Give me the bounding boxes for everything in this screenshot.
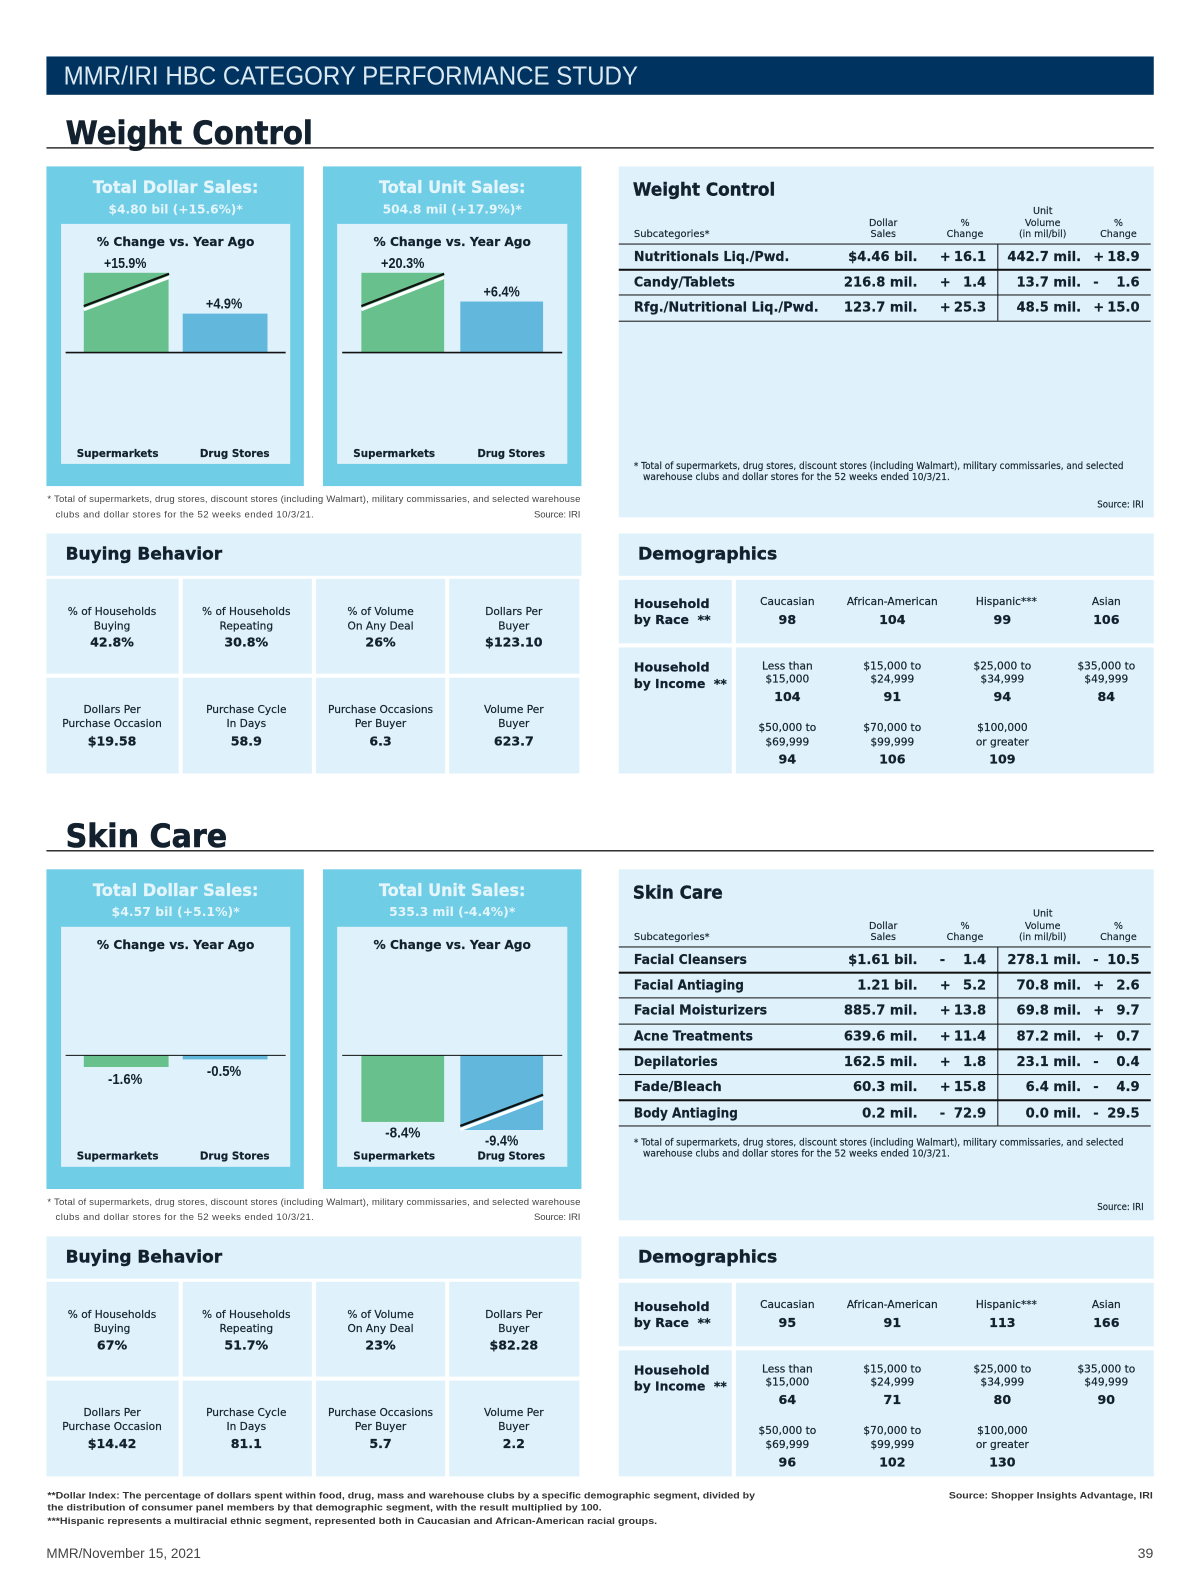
table rows: 25.3	[954, 301, 986, 316]
panel: demographics: $35,000 to	[1077, 1364, 1135, 1376]
table rows: +	[1093, 1030, 1104, 1045]
bar chart: unit sales: Supermarkets	[353, 448, 435, 460]
panel: buying behavior: % of Households	[68, 1309, 156, 1321]
table rows: Rfg./Nutritional Liq./Pwd.	[634, 301, 819, 316]
bar chart: unit sales: -9.4%	[485, 1133, 519, 1150]
table rows: $1.61 bil.	[848, 953, 918, 968]
table rows: 0.4	[1116, 1055, 1140, 1070]
panel: demographics: 99	[994, 612, 1011, 627]
table rows: Fade/Bleach	[634, 1080, 722, 1095]
table rows: +	[1093, 250, 1104, 265]
table rows: 1.6	[1116, 275, 1140, 290]
bar chart: dollar sales: Supermarkets	[77, 1151, 158, 1163]
panel: demographics: or greater	[976, 1439, 1030, 1451]
page footer: 39	[1138, 1545, 1153, 1561]
table header: Change	[947, 229, 983, 240]
table header: Volume	[1025, 921, 1061, 932]
panel: demographics: 104	[774, 689, 801, 704]
panel: demographics: 109	[989, 751, 1016, 766]
bar chart: unit sales: +20.3%	[381, 255, 425, 272]
table rows	[619, 244, 1151, 322]
table rows: +	[940, 301, 951, 316]
panel: demographics: $34,999	[980, 1377, 1024, 1389]
dollar index footnotes: the distribution of consumer panel members by that demographic segment, with the result multiplied by 100.	[47, 1503, 602, 1514]
panel: subcategories table: Weight Control	[633, 180, 775, 201]
panel: demographics: 166	[1093, 1315, 1120, 1330]
panel: buying behavior: $123.10	[485, 634, 543, 649]
panel: demographics: $70,000 to	[863, 722, 921, 734]
table header: %	[1114, 218, 1123, 229]
bar chart: dollar sales	[66, 255, 286, 460]
panel: demographics: Hispanic***	[976, 1299, 1037, 1311]
bar chart: dollar sales: -0.5%	[207, 1063, 242, 1080]
table rows: 13.7 mil.	[1017, 275, 1081, 290]
panel: demographics: 95	[779, 1315, 796, 1330]
panel: demographics: $100,000	[977, 1425, 1028, 1437]
table rows: +	[1093, 1004, 1104, 1019]
panel: demographics: 64	[779, 1392, 796, 1407]
bar chart: dollar sales: Drug Stores	[200, 448, 270, 460]
chart footnote: Source: IRI	[534, 509, 580, 520]
panel: buying behavior: 81.1	[231, 1436, 262, 1451]
table header: Volume	[1025, 218, 1061, 229]
panel: demographics: Caucasian	[760, 596, 815, 608]
panel: buying behavior: Dollars Per	[84, 1407, 141, 1419]
panel: demographics: by Race **	[634, 612, 711, 627]
panel: demographics: Asian	[1092, 1299, 1121, 1311]
table rows: 87.2 mil.	[1017, 1030, 1081, 1045]
table rows: 5.2	[963, 978, 986, 993]
table rows: 162.5 mil.	[844, 1055, 918, 1070]
panel: demographics: $69,999	[765, 736, 809, 748]
panel: demographics: 91	[884, 1315, 901, 1330]
panel: total unit sales: Total Unit Sales:	[379, 178, 525, 198]
panel: buying behavior: In Days	[226, 1421, 266, 1433]
panel: demographics: 91	[884, 689, 901, 704]
panel: demographics: $99,999	[870, 736, 914, 748]
table rows: 1.21 bil.	[857, 978, 918, 993]
table rows: 0.7	[1116, 1030, 1140, 1045]
table rows: -	[940, 1106, 945, 1121]
panel: total dollar sales: Total Dollar Sales:	[93, 178, 258, 198]
panel: demographics: $49,999	[1084, 1377, 1128, 1389]
panel: buying behavior: 67%	[97, 1337, 128, 1352]
panel: demographics: 98	[779, 612, 796, 627]
panel: buying behavior: Buyer	[498, 620, 530, 632]
panel: demographics: 94	[994, 689, 1011, 704]
bar chart: dollar sales: +15.9%	[104, 255, 147, 272]
table rows: Facial Cleansers	[634, 953, 747, 968]
table rows: -	[1093, 275, 1099, 290]
table header: %	[960, 921, 970, 932]
panel: subcategories table	[619, 166, 1154, 517]
table header: Subcategories*	[634, 932, 710, 943]
table rows: +	[1093, 978, 1104, 993]
table rows: 0.2 mil.	[862, 1106, 918, 1121]
table header: (in mil/bil)	[1019, 229, 1066, 240]
table rows: Facial Moisturizers	[634, 1004, 767, 1019]
table rows: -	[1093, 1080, 1099, 1095]
panel: demographics: $15,000	[765, 674, 809, 686]
table rows: 72.9	[954, 1106, 986, 1121]
panel: demographics: $35,000 to	[1077, 661, 1135, 673]
table rows: 69.8 mil.	[1017, 1004, 1081, 1019]
table rows: 48.5 mil.	[1017, 301, 1081, 316]
panel: demographics: $24,999	[870, 1377, 914, 1389]
panel: demographics: $15,000 to	[863, 661, 921, 673]
panel: total unit sales: 535.3 mil (-4.4%)*	[389, 905, 516, 919]
panel: buying behavior: 6.3	[369, 733, 392, 748]
table rows: +	[940, 1030, 951, 1045]
panel: buying behavior: % of Volume	[347, 606, 414, 618]
panel: buying behavior: In Days	[226, 718, 266, 730]
section title: weight control: Weight Control	[66, 114, 313, 152]
panel: demographics	[619, 1236, 1154, 1476]
table header: Sales	[870, 932, 896, 943]
chart footnote	[47, 1197, 580, 1223]
dollar index footnotes: ***Hispanic represents a multiracial ethnic segment, represented both in Caucasian and African-American racial groups.	[47, 1516, 657, 1527]
table header: Change	[947, 932, 983, 943]
table rows: +	[1093, 301, 1104, 316]
panel: demographics: Household	[634, 660, 710, 675]
table rows: -	[1093, 1106, 1099, 1121]
chart footnote: Source: IRI	[534, 1212, 580, 1223]
panel: demographics: $99,999	[870, 1439, 914, 1451]
panel: buying behavior: Buying	[94, 1323, 130, 1335]
panel: buying behavior: % of Households	[202, 1309, 291, 1321]
table rows: 29.5	[1107, 1106, 1140, 1121]
panel: buying behavior: 623.7	[494, 733, 534, 748]
table header: Unit	[1033, 206, 1053, 217]
table rows: -	[1093, 953, 1099, 968]
page footer	[46, 1545, 1153, 1561]
header banner	[46, 56, 1154, 95]
table rows: 442.7 mil.	[1007, 250, 1081, 265]
panel: total dollar sales: $4.80 bil (+15.6%)*	[109, 202, 243, 216]
panel: demographics: Household	[634, 1363, 710, 1378]
panel: buying behavior: $19.58	[88, 733, 136, 748]
table rows: 18.9	[1107, 250, 1140, 265]
panel: demographics: 80	[994, 1392, 1011, 1407]
table rows: -	[940, 953, 945, 968]
panel: demographics: $15,000	[765, 1377, 809, 1389]
panel: buying behavior: 23%	[365, 1337, 396, 1352]
table footnote: warehouse clubs and dollar stores for the 52 weeks ended 10/3/21.	[643, 1149, 950, 1160]
panel: demographics: 96	[779, 1454, 796, 1469]
table rows: Nutritionals Liq./Pwd.	[634, 250, 789, 265]
table rows: +	[940, 1080, 951, 1095]
panel: buying behavior: Purchase Cycle	[206, 1407, 286, 1419]
table rows: +	[940, 978, 951, 993]
panel: demographics: $15,000 to	[863, 1364, 921, 1376]
panel: buying behavior: 5.7	[369, 1436, 392, 1451]
panel: demographics: $25,000 to	[973, 1364, 1031, 1376]
bar chart: unit sales: +6.4%	[484, 283, 520, 300]
panel: total unit sales: % Change vs. Year Ago	[373, 938, 531, 952]
panel: subcategories table: Skin Care	[633, 883, 723, 904]
panel: demographics: 84	[1098, 689, 1115, 704]
panel: buying behavior: Per Buyer	[355, 1421, 407, 1433]
table rows: 885.7 mil.	[844, 1004, 918, 1019]
table header	[634, 206, 1137, 240]
panel: total dollar sales: % Change vs. Year Ago	[97, 938, 254, 952]
panel: buying behavior: 51.7%	[224, 1337, 269, 1352]
table rows: 10.5	[1107, 953, 1140, 968]
panel: buying behavior: Purchase Occasion	[62, 1421, 162, 1433]
panel: buying behavior: % of Households	[202, 606, 291, 618]
panel: buying behavior: % of Volume	[347, 1309, 414, 1321]
panel: buying behavior: Volume Per	[484, 1407, 544, 1419]
table rows: 16.1	[954, 250, 986, 265]
section title: skin care: Skin Care	[66, 817, 227, 855]
panel: demographics: by Income **	[634, 1379, 727, 1394]
bar chart: unit sales: Drug Stores	[477, 448, 545, 460]
bar chart: dollar sales: Supermarkets	[77, 448, 158, 460]
panel: demographics: $50,000 to	[758, 1425, 816, 1437]
panel: demographics: African-American	[847, 1299, 938, 1311]
section: weight control	[46, 114, 1154, 774]
panel: demographics: 106	[879, 751, 906, 766]
panel: demographics: 104	[879, 612, 906, 627]
panel: demographics: 71	[884, 1392, 901, 1407]
bar chart: unit sales: Drug Stores	[477, 1151, 545, 1163]
table rows: Body Antiaging	[634, 1106, 738, 1121]
table rows: 1.8	[963, 1055, 986, 1070]
table footnote: Source: IRI	[1097, 499, 1144, 510]
table rows: Acne Treatments	[634, 1030, 753, 1045]
panel: buying behavior: Dollars Per	[485, 1309, 543, 1321]
table footnote: Source: IRI	[1097, 1202, 1144, 1213]
table rows: 0.0 mil.	[1026, 1106, 1081, 1121]
panel: buying behavior: 30.8%	[224, 634, 269, 649]
panel: demographics: Hispanic***	[976, 596, 1037, 608]
panel: buying behavior: Buyer	[498, 718, 530, 730]
table rows: 70.8 mil.	[1017, 978, 1081, 993]
table rows: +	[940, 1055, 951, 1070]
panel: demographics: 130	[989, 1454, 1016, 1469]
bar chart: unit sales	[342, 255, 562, 460]
panel: total unit sales: 504.8 mil (+17.9%)*	[383, 202, 523, 216]
bar chart: dollar sales: Drug Stores	[200, 1151, 270, 1163]
panel: demographics: Demographics	[638, 545, 777, 565]
panel: total unit sales: % Change vs. Year Ago	[373, 235, 531, 249]
table rows: $4.46 bil.	[848, 250, 918, 265]
panel: demographics: Less than	[762, 661, 813, 673]
panel: demographics: 102	[879, 1454, 905, 1469]
table rows: +	[940, 275, 951, 290]
panel: buying behavior: Repeating	[219, 620, 273, 632]
table header: Subcategories*	[634, 229, 710, 240]
panel: demographics: by Income **	[634, 676, 727, 691]
panel: total unit sales	[323, 166, 581, 486]
header banner: MMR/IRI HBC CATEGORY PERFORMANCE STUDY	[64, 61, 638, 91]
table footnote	[634, 461, 1144, 510]
chart footnote: clubs and dollar stores for the 52 weeks ended 10/3/21.	[56, 509, 314, 520]
panel: buying behavior	[46, 1236, 581, 1476]
dollar index footnotes	[47, 1491, 1153, 1527]
bar chart: dollar sales: -1.6%	[108, 1071, 143, 1088]
panel: total unit sales: Total Unit Sales:	[379, 881, 525, 901]
panel: buying behavior: Buying Behavior	[66, 545, 223, 565]
table rows: 123.7 mil.	[844, 301, 918, 316]
table rows: 216.8 mil.	[844, 275, 918, 290]
panel: demographics: Household	[634, 596, 710, 611]
bar chart: unit sales: Supermarkets	[353, 1151, 435, 1163]
panel: demographics: $49,999	[1084, 674, 1128, 686]
bar chart: unit sales: -8.4%	[385, 1125, 421, 1142]
panel: buying behavior: On Any Deal	[348, 1323, 414, 1335]
table header: Dollar	[869, 921, 897, 932]
panel: demographics: 90	[1098, 1392, 1115, 1407]
bar chart: unit sales	[342, 1055, 562, 1163]
table rows: 60.3 mil.	[853, 1080, 918, 1095]
table rows: +	[940, 250, 951, 265]
panel: demographics: Caucasian	[760, 1299, 815, 1311]
panel: total dollar sales: Total Dollar Sales:	[93, 881, 258, 901]
panel: demographics: $69,999	[765, 1439, 809, 1451]
panel: buying behavior: Buyer	[498, 1323, 530, 1335]
page footer: MMR/November 15, 2021	[46, 1545, 201, 1561]
table footnote	[634, 1138, 1144, 1213]
panel: buying behavior	[46, 533, 581, 774]
panel: buying behavior: 42.8%	[90, 634, 134, 649]
panel: buying behavior: On Any Deal	[348, 620, 414, 632]
table header: %	[960, 218, 970, 229]
table footnote: warehouse clubs and dollar stores for the 52 weeks ended 10/3/21.	[643, 472, 950, 483]
panel: total dollar sales	[46, 166, 304, 486]
panel: demographics: 113	[989, 1315, 1016, 1330]
panel: demographics	[619, 533, 1154, 774]
panel: subcategories table	[619, 869, 1154, 1220]
table rows: -	[1093, 1055, 1099, 1070]
section: skin care	[46, 817, 1154, 1476]
table rows	[619, 946, 1151, 1126]
chart footnote	[47, 494, 580, 520]
panel: buying behavior: 26%	[365, 634, 396, 649]
panel: buying behavior: Buyer	[498, 1421, 530, 1433]
panel: buying behavior: 58.9	[231, 733, 262, 748]
panel: buying behavior: Dollars Per	[84, 704, 141, 716]
panel: demographics: Asian	[1092, 596, 1121, 608]
panel: demographics: $25,000 to	[973, 661, 1031, 673]
table rows: +	[940, 1004, 951, 1019]
panel: demographics: 94	[779, 751, 796, 766]
bar chart: dollar sales: +4.9%	[206, 296, 243, 313]
table rows: 2.6	[1116, 978, 1140, 993]
table header: Change	[1100, 229, 1137, 240]
table header: %	[1114, 921, 1123, 932]
panel: buying behavior: Repeating	[219, 1323, 273, 1335]
panel: demographics: African-American	[847, 596, 938, 608]
panel: buying behavior: Buying	[94, 620, 130, 632]
table rows: 4.9	[1116, 1080, 1140, 1095]
panel: demographics: $70,000 to	[863, 1425, 921, 1437]
table rows: 278.1 mil.	[1007, 953, 1081, 968]
panel: demographics: or greater	[976, 736, 1030, 748]
panel: demographics: by Race **	[634, 1315, 711, 1330]
dollar index footnotes: Source: Shopper Insights Advantage, IRI	[949, 1491, 1153, 1502]
chart footnote: clubs and dollar stores for the 52 weeks ended 10/3/21.	[56, 1212, 314, 1223]
panel: buying behavior: Purchase Occasions	[328, 704, 433, 716]
table rows: Depilatories	[634, 1055, 718, 1070]
chart footnote: * Total of supermarkets, drug stores, discount stores (including Walmart), military commissaries, and selected warehouse	[47, 1197, 580, 1208]
panel: buying behavior: Volume Per	[484, 704, 544, 716]
panel: buying behavior: Purchase Occasion	[62, 718, 162, 730]
panel: demographics: $24,999	[870, 674, 914, 686]
table rows: 13.8	[954, 1004, 986, 1019]
table rows: 15.8	[954, 1080, 986, 1095]
panel: demographics: $34,999	[980, 674, 1024, 686]
table header	[634, 909, 1137, 943]
panel: buying behavior: Dollars Per	[485, 606, 543, 618]
table rows: 9.7	[1116, 1004, 1140, 1019]
bar chart: dollar sales	[66, 1055, 286, 1163]
panel: total dollar sales: % Change vs. Year Ago	[97, 235, 254, 249]
table header: Dollar	[869, 218, 897, 229]
table header: Unit	[1033, 909, 1053, 920]
table rows: 23.1 mil.	[1017, 1055, 1081, 1070]
panel: buying behavior: Per Buyer	[355, 718, 407, 730]
panel: buying behavior: Buying Behavior	[66, 1248, 223, 1268]
table header: Sales	[870, 229, 896, 240]
panel: demographics: Demographics	[638, 1248, 777, 1268]
panel: total dollar sales: $4.57 bil (+5.1%)*	[112, 905, 240, 919]
table rows: 15.0	[1107, 301, 1140, 316]
panel: demographics: Less than	[762, 1364, 813, 1376]
panel: buying behavior: $14.42	[88, 1436, 136, 1451]
panel: demographics: $100,000	[977, 722, 1028, 734]
table rows: 639.6 mil.	[844, 1030, 918, 1045]
panel: buying behavior: % of Households	[68, 606, 156, 618]
panel: demographics: $50,000 to	[758, 722, 816, 734]
panel: buying behavior: Purchase Occasions	[328, 1407, 433, 1419]
table rows: 1.4	[963, 953, 986, 968]
panel: buying behavior: Purchase Cycle	[206, 704, 286, 716]
table rows: 1.4	[963, 275, 986, 290]
panel: demographics: Household	[634, 1299, 710, 1314]
panel: buying behavior: 2.2	[503, 1436, 525, 1451]
panel: total dollar sales	[46, 869, 304, 1189]
table footnote: * Total of supermarkets, drug stores, discount stores (including Walmart), military commissaries, and selected	[634, 461, 1123, 472]
dollar index footnotes: **Dollar Index: The percentage of dollars spent within food, drug, mass and warehouse clubs by a specific demographic segment, divided by	[47, 1491, 756, 1502]
table footnote: * Total of supermarkets, drug stores, discount stores (including Walmart), military commissaries, and selected	[634, 1138, 1123, 1149]
table rows: Candy/Tablets	[634, 275, 735, 290]
table header: Change	[1100, 932, 1137, 943]
table rows: Facial Antiaging	[634, 978, 744, 993]
chart footnote: * Total of supermarkets, drug stores, discount stores (including Walmart), military commissaries, and selected warehouse	[47, 494, 580, 505]
panel: buying behavior: $82.28	[489, 1337, 538, 1352]
table rows: 6.4 mil.	[1026, 1080, 1081, 1095]
table rows: 11.4	[954, 1030, 986, 1045]
table header: (in mil/bil)	[1019, 932, 1066, 943]
panel: demographics: 106	[1093, 612, 1120, 627]
panel: total unit sales	[323, 869, 581, 1189]
